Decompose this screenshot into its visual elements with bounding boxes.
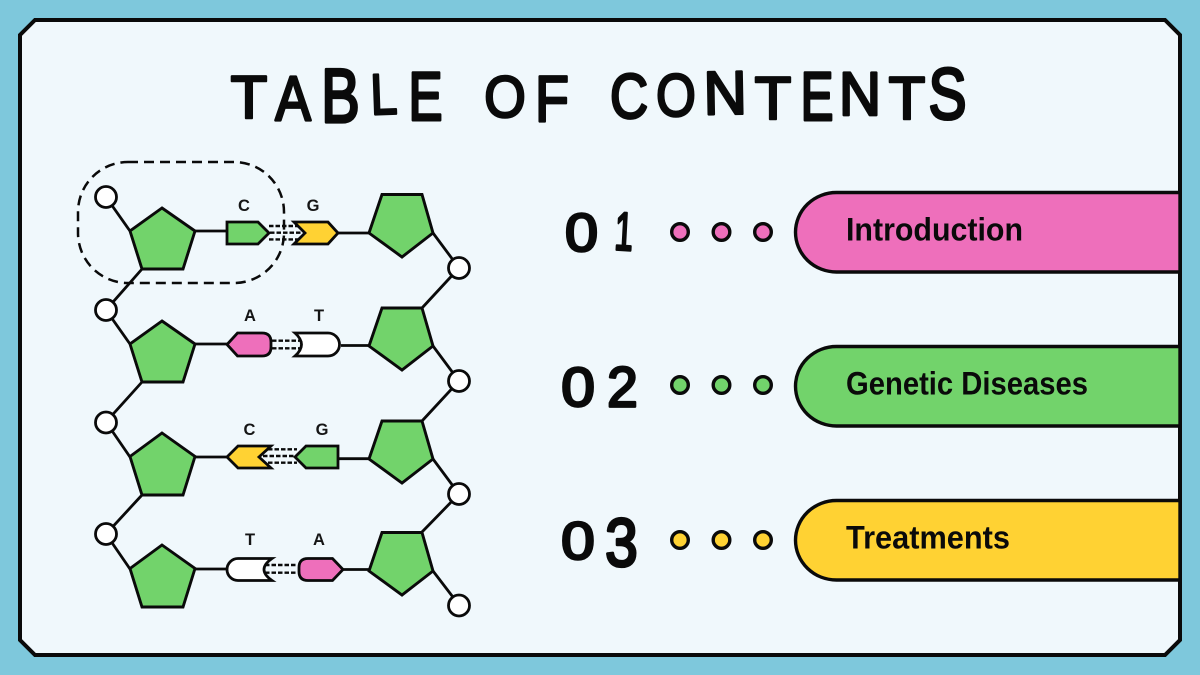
DNA diagram [78,162,470,616]
pill: Introduction [796,192,1180,272]
title: E [408,57,443,135]
dots [672,377,771,393]
title: C [610,62,648,132]
dots [672,532,771,548]
title: T [231,64,267,131]
dashed highlight around nucleotide [78,162,284,283]
title: N [703,58,747,128]
section 01 [565,192,1180,272]
title: L [369,63,398,127]
base pair C-G row 3: G [316,421,328,439]
base pair C-G row 1: C [238,197,250,215]
pill: Genetic Diseases: Genetic Diseases [846,366,1088,402]
number 03 [561,506,638,581]
pill: Genetic Diseases [796,346,1180,426]
title: E [801,58,833,135]
number 03: 0 [561,512,595,571]
title [231,54,967,139]
number 02 [561,356,638,419]
title: B [321,54,360,139]
base pair C-G row 3 [227,421,338,468]
number 01: 0 [565,203,598,263]
base pair T-A row 4: T [245,531,255,549]
pill: Treatments [796,500,1180,580]
base pair C-G row 3: C [244,421,256,439]
base pair C-G row 1 [227,197,338,244]
title: N [839,60,881,128]
base pair A-T row 2: A [244,307,256,325]
phosphate circles [96,186,470,616]
pill: Introduction: Introduction [846,212,1023,248]
section 03 [561,500,1180,581]
title: O [484,64,526,130]
number 01: 1 [613,200,635,262]
title: F [535,63,569,135]
title: S [928,54,967,135]
base pair T-A row 4 [227,531,343,580]
title: A [275,64,311,134]
left sugar pentagons [130,208,195,607]
base pair T-A row 4: A [313,531,325,549]
number 02: 0 [561,357,595,418]
base pair A-T row 2: T [314,307,324,325]
title: T [889,65,925,132]
dots [672,224,771,240]
backbone lines [106,197,459,605]
number 03: 3 [605,506,638,581]
right sugar pentagons [369,194,433,595]
section 02 [561,346,1180,426]
base pair C-G row 1: G [307,197,319,215]
number 01 [565,200,635,263]
title: O [656,62,696,129]
pill: Treatments: Treatments [846,520,1010,556]
base pair A-T row 2 [227,307,340,356]
title: T [755,65,791,132]
number 02: 2 [607,356,638,419]
